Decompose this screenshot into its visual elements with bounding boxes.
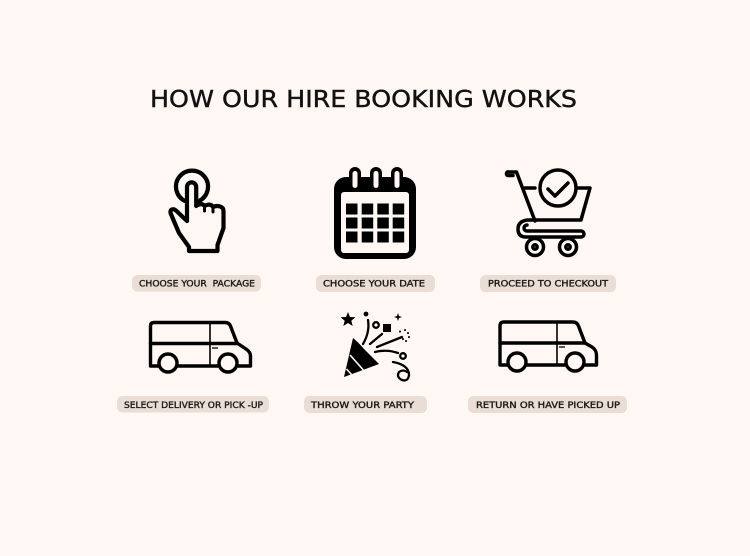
step: return or have picked up xyxy=(468,322,627,413)
icon: return van xyxy=(500,322,596,371)
label: return or have picked up: RETURN OR HAVE PICKED UP xyxy=(476,401,620,411)
icon: calendar xyxy=(334,167,416,259)
label: select delivery or pick-up xyxy=(117,396,269,412)
step: throw your party xyxy=(304,312,427,413)
icon: party popper xyxy=(340,312,409,380)
label: choose your date: CHOOSE YOUR DATE xyxy=(323,280,425,290)
label: throw your party: THROW YOUR PARTY xyxy=(310,401,415,411)
step: choose your package xyxy=(132,171,261,292)
step: proceed to checkout xyxy=(480,170,616,292)
step: choose your date xyxy=(316,167,435,292)
icon: shopping cart with check xyxy=(506,170,590,256)
label: choose your package: CHOOSE YOUR PACKAGE xyxy=(139,280,255,290)
icon: pointing hand xyxy=(170,171,224,251)
icon: delivery van xyxy=(150,322,250,372)
label: proceed to checkout: PROCEED TO CHECKOUT xyxy=(488,280,609,290)
step: select delivery or pick-up xyxy=(117,322,269,412)
label: return or have picked up xyxy=(468,396,627,413)
label: select delivery or pick-up: SELECT DELIVERY OR PICK -UP xyxy=(124,401,263,411)
title: HOW OUR HIRE BOOKING WORKS xyxy=(150,87,577,113)
